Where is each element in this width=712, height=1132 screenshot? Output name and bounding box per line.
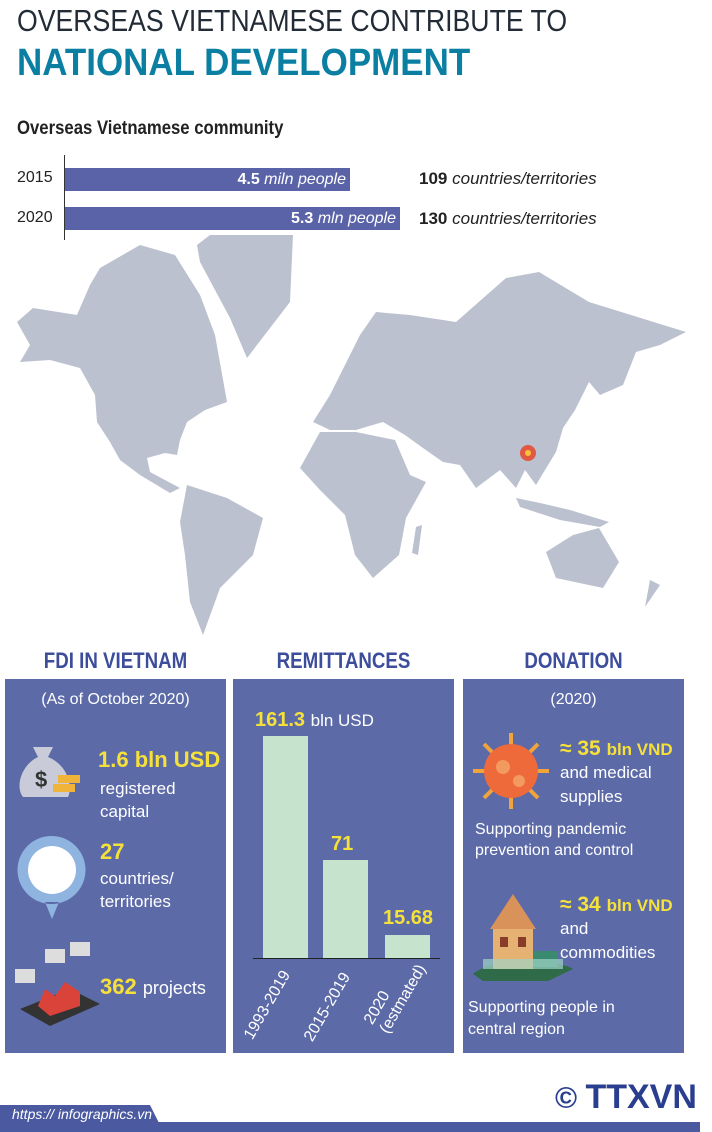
icon: money bag: $	[35, 767, 47, 792]
panel: remittances: 1993-2019	[241, 968, 294, 1042]
panel: donation	[463, 679, 684, 1053]
panel: donation: Supporting pandemic	[475, 821, 626, 838]
panel: donation: (2020)	[550, 691, 597, 708]
panel: donation: ≈ 35 bln VND	[560, 737, 673, 760]
panel: remittances	[233, 679, 454, 1053]
panel: donation: Supporting people in	[468, 999, 615, 1016]
panel: FDI: territories	[100, 892, 171, 911]
panel: remittances: 2015-2019	[301, 970, 354, 1044]
title	[17, 3, 567, 84]
panel: remittances: 71	[331, 833, 353, 855]
panel: donation: central region	[468, 1021, 565, 1038]
heading: remittances: REMITTANCES	[277, 648, 410, 673]
bar chart: community: 130 countries/territories	[419, 209, 597, 228]
title: NATIONAL DEVELOPMENT	[17, 42, 470, 84]
icon: flooded house	[473, 894, 573, 981]
panel: donation: prevention and control	[475, 842, 633, 859]
panel: remittances: 15.68	[383, 907, 433, 929]
panel: FDI: 27	[100, 839, 124, 864]
panel: FDI: (As of October 2020)	[41, 691, 190, 708]
bar chart: community: 2020	[17, 209, 53, 226]
icon: tablet chart	[15, 942, 100, 1026]
bar chart: community: 109 countries/territories	[419, 169, 597, 188]
map	[17, 235, 686, 635]
panel: FDI: registered	[100, 779, 176, 798]
bar: 2020	[385, 935, 430, 958]
bar: 1993-2019	[263, 736, 308, 958]
panel: remittances: 2020	[361, 988, 394, 1028]
panel: FDI: 1.6 bln USD	[98, 747, 220, 772]
title: OVERSEAS VIETNAMESE CONTRIBUTE TO	[17, 3, 567, 38]
panel: donation: ≈ 34 bln VND	[560, 893, 673, 916]
panel: FDI	[5, 679, 226, 1053]
logo: © TTXVN	[555, 1078, 697, 1116]
panel: FDI: capital	[100, 802, 149, 821]
heading: donation: DONATION	[524, 648, 623, 673]
panel: donation: commodities	[560, 943, 655, 962]
bar chart: community	[17, 155, 597, 240]
icon: pin	[18, 836, 86, 919]
panel: donation: and medical	[560, 763, 652, 782]
panel: remittances: (estmated)	[377, 962, 430, 1036]
heading: FDI: FDI IN VIETNAM	[44, 648, 187, 673]
subtitle: Overseas Vietnamese community	[17, 118, 283, 139]
bar chart: community: 4.5 miln people	[237, 171, 346, 188]
bar chart: community: 2015	[17, 169, 53, 186]
panel: FDI: countries/	[100, 869, 174, 888]
icon: money bag	[20, 747, 80, 797]
panel: donation: supplies	[560, 787, 622, 806]
panel: FDI: 362 projects	[100, 974, 206, 999]
panel: donation: and	[560, 919, 588, 938]
footer	[0, 1105, 700, 1132]
bar: 2015-2019	[323, 860, 368, 958]
bar chart: community: 5.3 mln people	[291, 210, 396, 227]
panel: remittances: 161.3 bln USD	[255, 709, 374, 731]
icon: virus	[473, 733, 549, 809]
footer: https:// infographics.vn	[12, 1106, 152, 1122]
